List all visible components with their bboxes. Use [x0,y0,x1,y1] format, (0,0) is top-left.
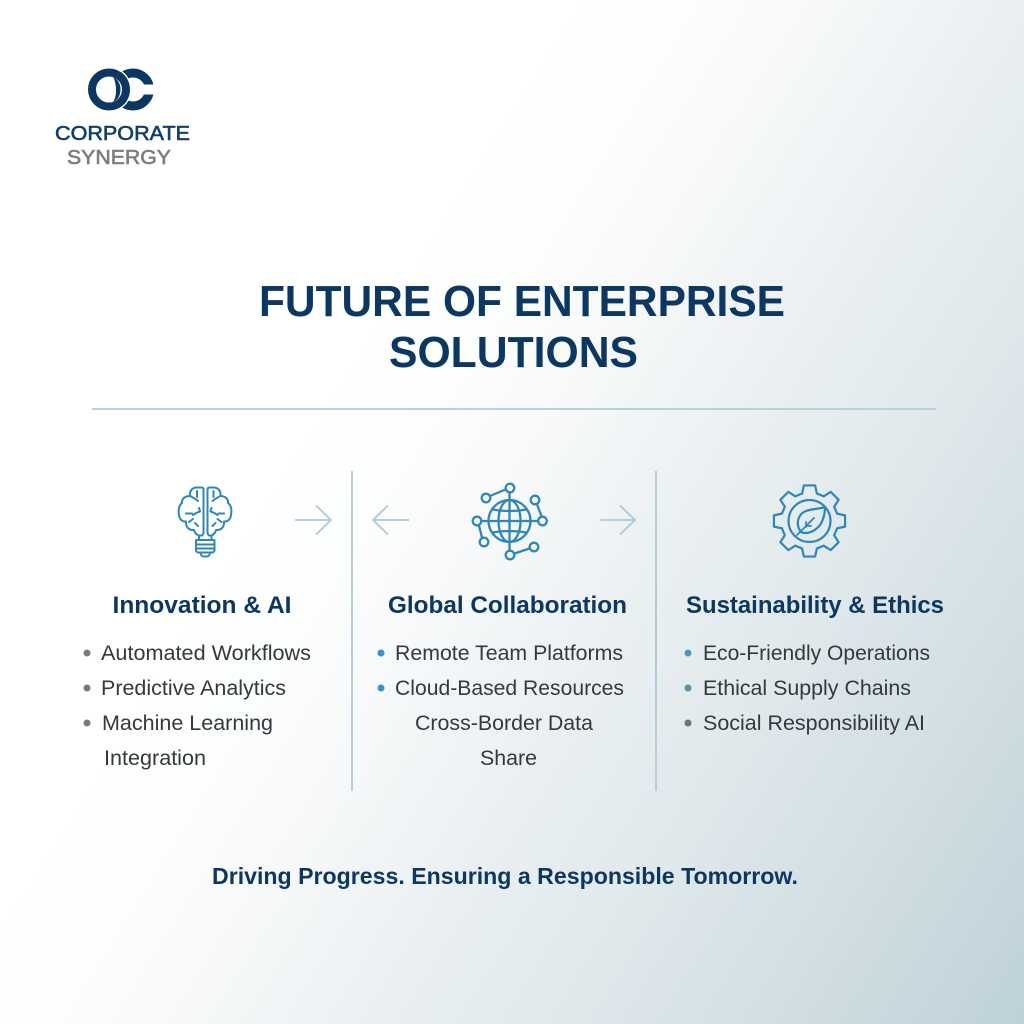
list: innovation items: Predictive Analytics [101,677,286,700]
list: innovation items: Machine Learning [102,712,273,735]
list: collaboration items: Share [480,747,537,770]
icon: brain light bulb [179,488,231,556]
list: sustainability items: Eco-Friendly Operations [703,642,930,665]
list: sustainability items [684,642,930,735]
logo: Corporate Synergy [55,68,190,169]
list: innovation items [84,642,311,770]
list: innovation items: Automated Workflows [101,642,311,665]
arrow: right [600,506,635,534]
list: collaboration items: Cloud-Based Resources [395,677,624,700]
panel: Innovation & AI [84,488,331,770]
heading: Global Collaboration: Global Collaboration [388,592,627,619]
title: FUTURE OF ENTERPRISE [259,277,785,326]
tagline: Driving Progress. Ensuring a Responsible Tomorrow. [212,863,798,889]
panel: Global Collaboration [373,484,635,770]
heading: Sustainability & Ethics: Sustainability & Ethics [686,592,944,619]
arrow: left [373,506,409,534]
logo: Corporate Synergy: SYNERGY [67,147,171,169]
list: innovation items: Integration [104,747,206,770]
heading: Innovation & AI: Innovation & AI [112,592,292,619]
logo wordmark: CORPORATE [55,122,190,145]
list: sustainability items: Social Responsibility AI [703,712,925,735]
list: collaboration items: Cross-Border Data [415,712,593,735]
title: SOLUTIONS [389,328,638,377]
title [259,277,785,377]
list: sustainability items: Ethical Supply Chains [703,677,911,700]
icon: gear with leaf [774,485,845,557]
list: collaboration items [378,642,624,770]
icon: globe with network nodes [473,484,547,559]
arrow: right [295,506,331,534]
list: collaboration items: Remote Team Platforms [395,642,623,665]
panel: Sustainability & Ethics [684,485,944,735]
logo mark: interlocking O and C [87,68,156,111]
